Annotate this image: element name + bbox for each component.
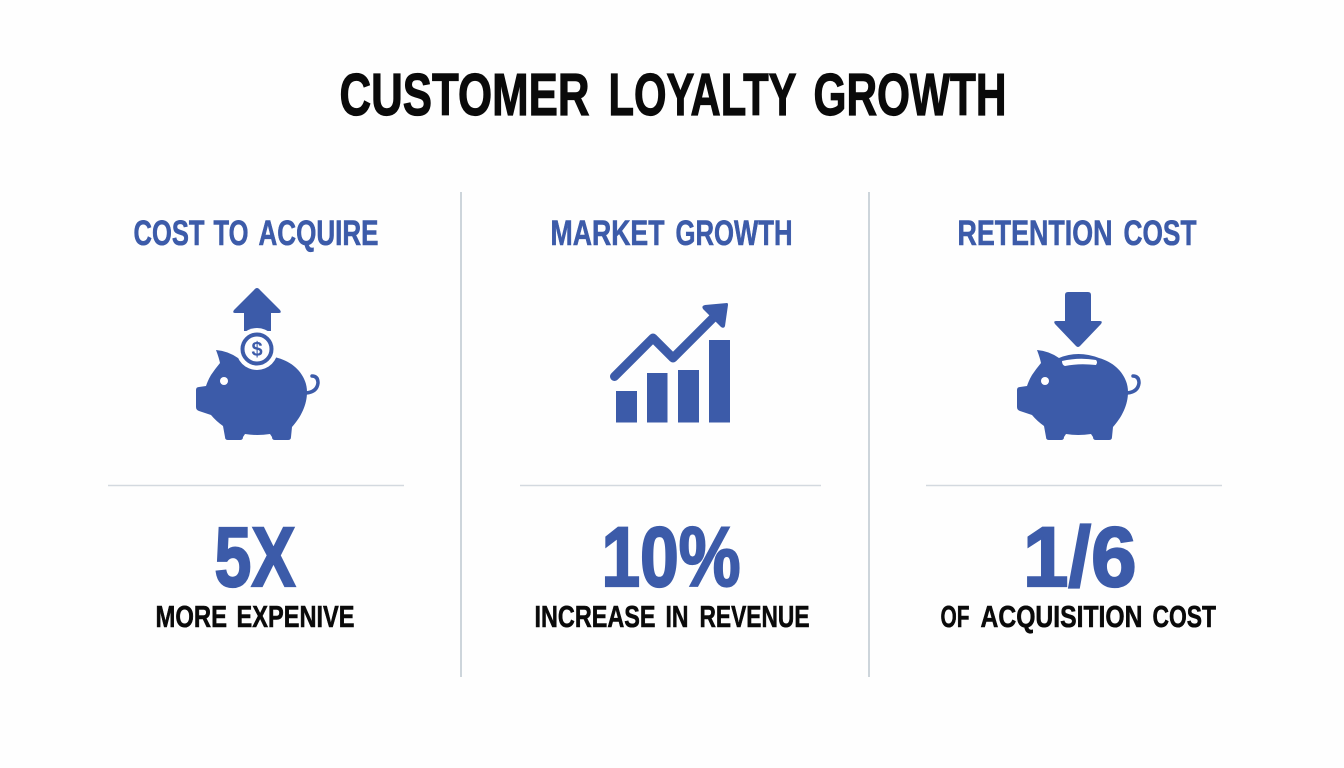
panel: cost to acquire: [108, 214, 404, 634]
icon: piggy bank with coin and up arrow: [196, 288, 318, 440]
caption: increase in revenue: [534, 599, 810, 634]
heading: market growth: [550, 214, 792, 253]
caption: increase in revenue: REVENUE: [700, 599, 810, 634]
icon: piggy bank with coin and up arrow: $: [251, 339, 263, 361]
caption: increase in revenue: IN: [666, 599, 688, 634]
title: GROWTH: [814, 62, 1006, 128]
caption: of acquisition cost: COST: [1152, 599, 1216, 634]
caption: more expenive: [156, 599, 354, 634]
caption: more expenive: MORE: [156, 599, 227, 634]
heading: market growth: GROWTH: [676, 214, 792, 253]
title: CUSTOMER: [340, 62, 590, 128]
stat: 10%: 10%: [602, 510, 740, 604]
title: [340, 62, 1006, 128]
title: LOYALTY: [608, 62, 796, 128]
stat: 1/6: 1/6: [1023, 510, 1136, 604]
panel: retention cost: [926, 214, 1222, 634]
heading: market growth: MARKET: [550, 214, 664, 253]
heading: cost to acquire: [134, 214, 378, 253]
heading: cost to acquire: COST: [134, 214, 204, 253]
panel: market growth: [520, 214, 821, 634]
heading: cost to acquire: ACQUIRE: [258, 214, 378, 253]
heading: retention cost: COST: [1124, 214, 1196, 253]
stat: 5X: 5X: [214, 510, 296, 604]
caption: of acquisition cost: ACQUISITION: [980, 599, 1142, 634]
caption: more expenive: EXPENIVE: [236, 599, 354, 634]
icon: bar chart with rising arrow: [614, 303, 730, 422]
icon: piggy bank with down arrow: [1017, 292, 1139, 440]
caption: of acquisition cost: OF: [940, 599, 970, 634]
heading: cost to acquire: TO: [214, 214, 248, 253]
caption: increase in revenue: INCREASE: [534, 599, 656, 634]
heading: retention cost: RETENTION: [958, 214, 1112, 253]
